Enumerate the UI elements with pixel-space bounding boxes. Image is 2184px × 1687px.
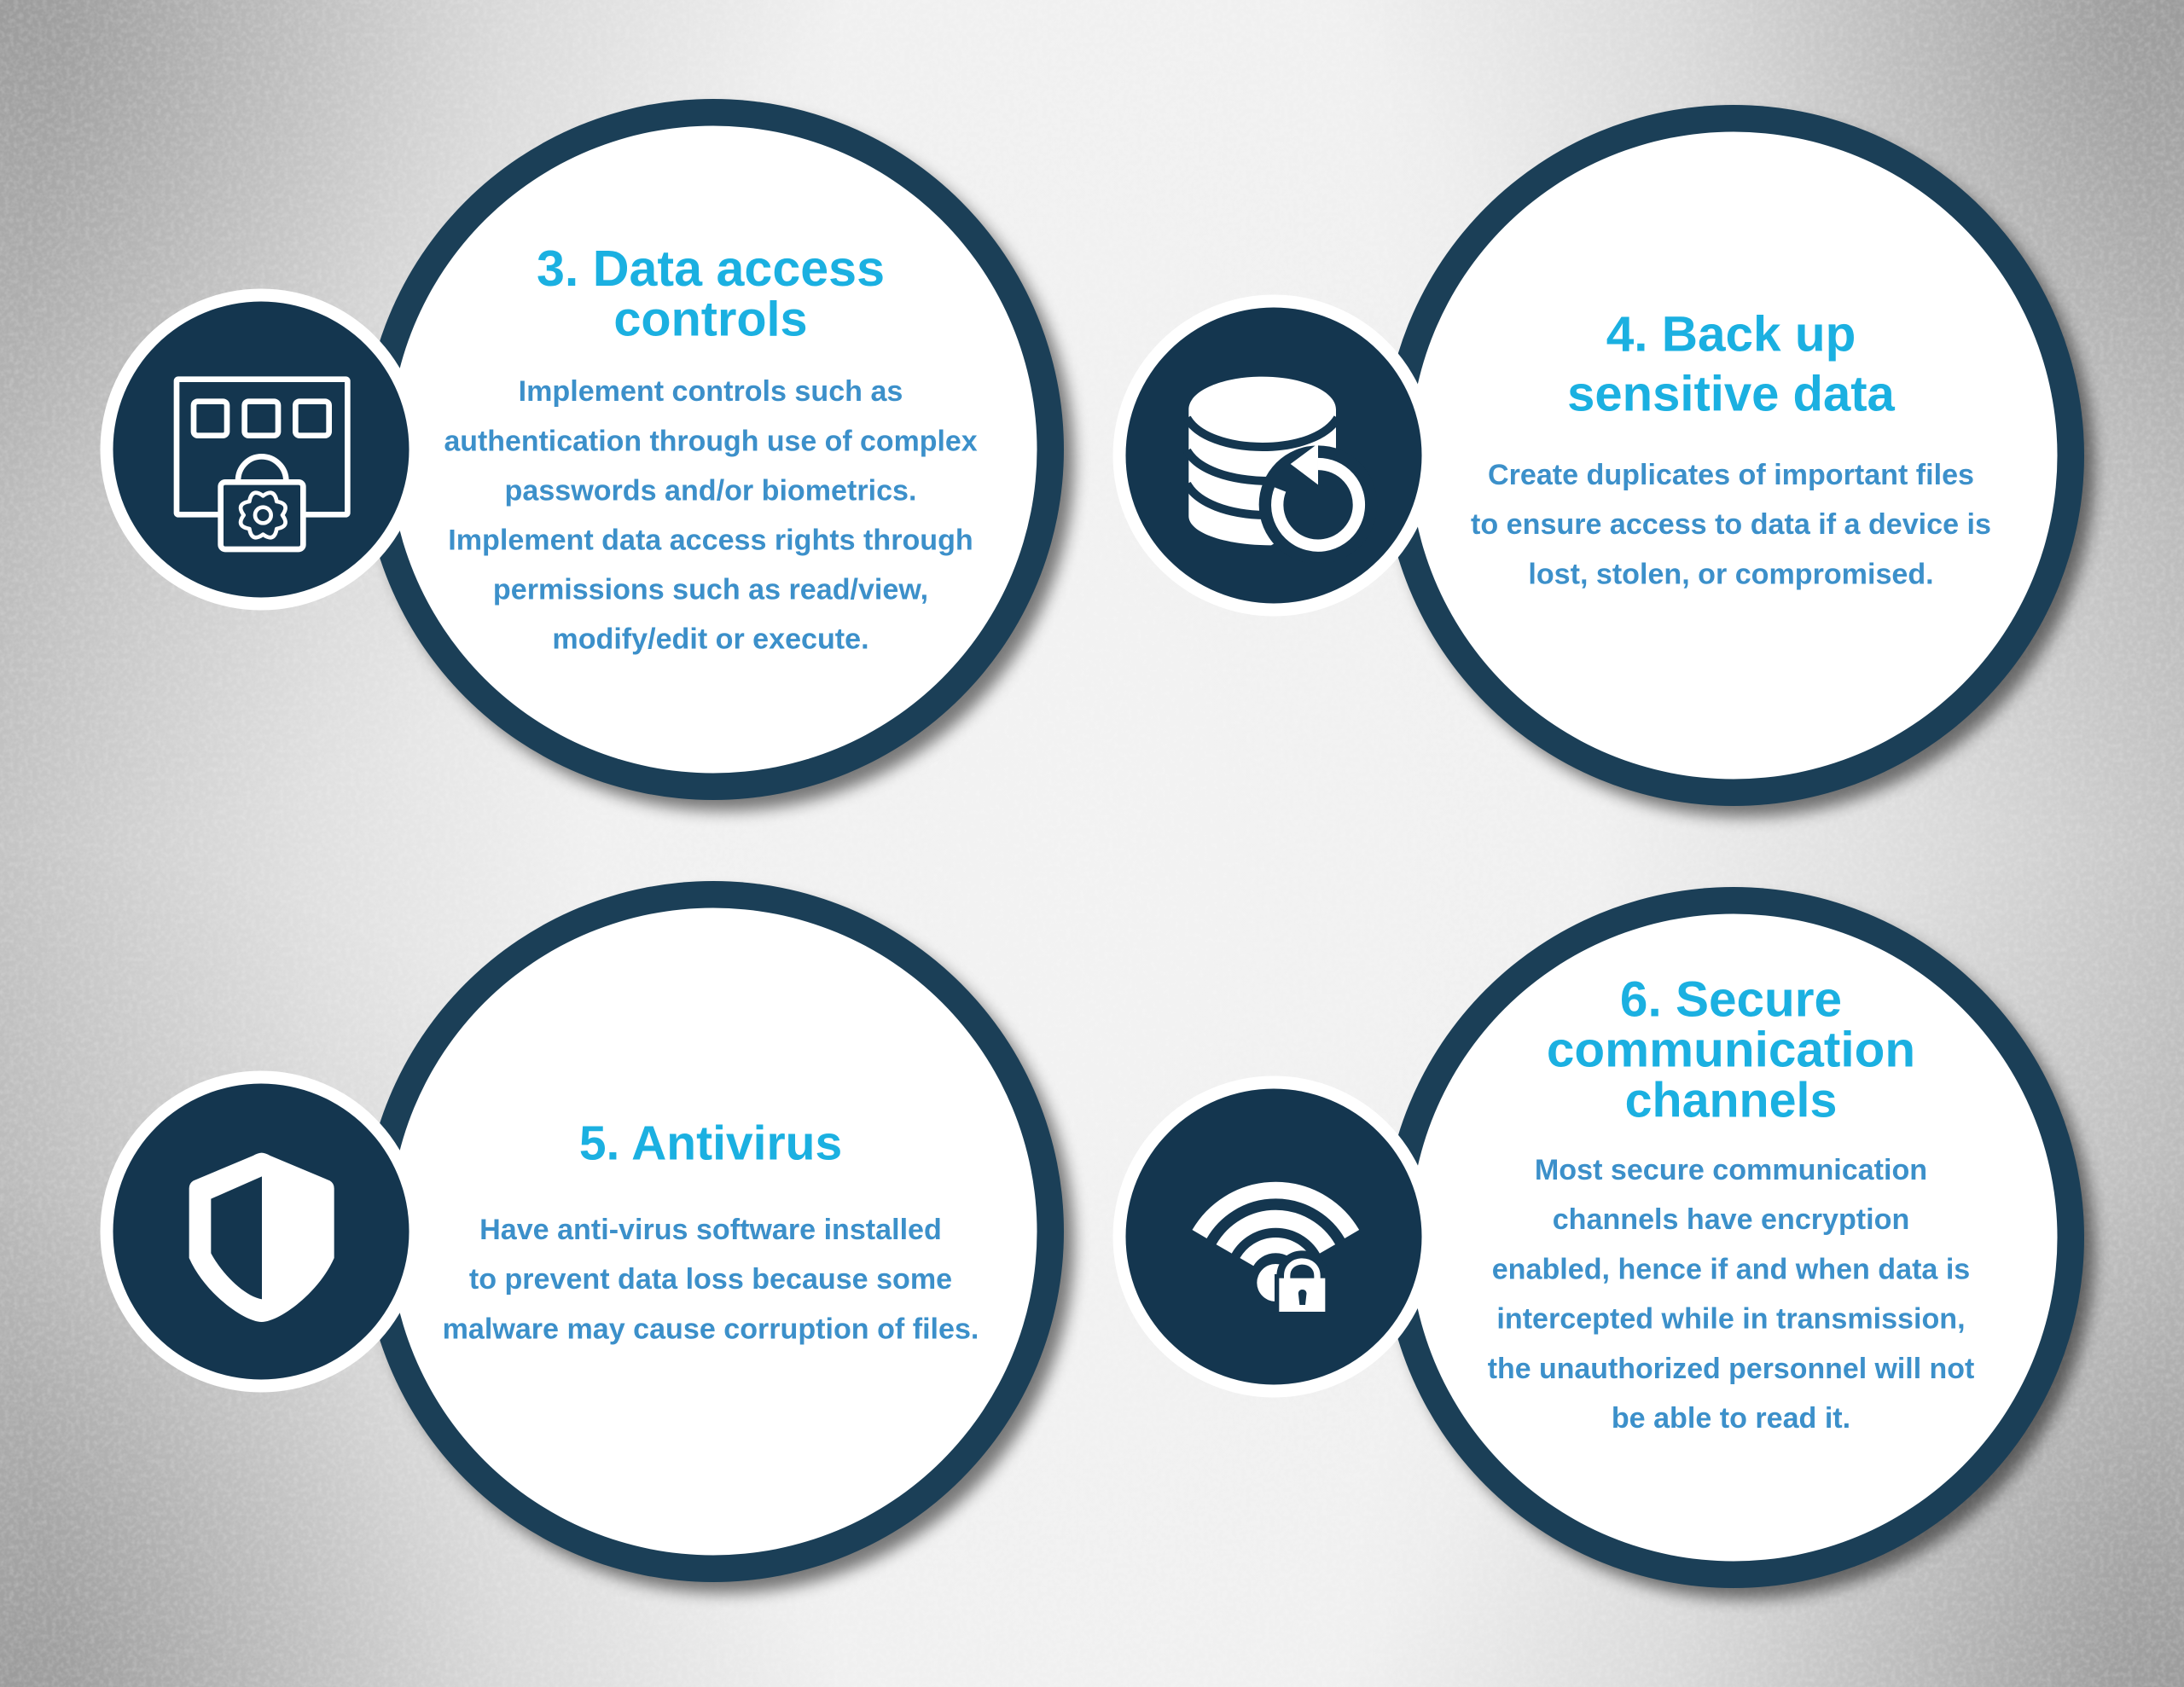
text block: secure channels description: the unauthorized personnel will not bbox=[1488, 1353, 1974, 1385]
text block: data access description: Implement data access rights through bbox=[448, 524, 973, 556]
text block: secure channels description: be able to read it. bbox=[1612, 1402, 1850, 1435]
icon: wifi with padlock bbox=[1112, 1076, 1435, 1397]
text block: backup description: lost, stolen, or compromised. bbox=[1528, 558, 1934, 590]
text block: data access description: modify/edit or execute. bbox=[552, 623, 869, 655]
text block: antivirus description: Have anti-virus software installed bbox=[479, 1214, 942, 1246]
icon: window with gear lock bbox=[101, 288, 421, 611]
heading: 6. Secure communication channels: channels bbox=[1625, 1073, 1837, 1128]
text block: data access description: permissions such as read/view, bbox=[493, 573, 928, 606]
text block: data access description bbox=[444, 375, 978, 655]
text block: backup description: to ensure access to data if a device is bbox=[1471, 508, 1991, 541]
text block: antivirus description: malware may cause corruption of files. bbox=[443, 1313, 979, 1346]
icon: database with restore arrow bbox=[1112, 295, 1435, 616]
text block: secure channels description: Most secure communication bbox=[1535, 1154, 1927, 1186]
text block: data access description: Implement controls such as bbox=[519, 375, 903, 408]
icon: shield bbox=[101, 1071, 421, 1392]
text block: backup description: Create duplicates of important files bbox=[1488, 459, 1974, 491]
text block: backup description bbox=[1471, 459, 1991, 590]
heading: 4. Back up sensitive data: sensitive data bbox=[1567, 367, 1896, 421]
text block: secure channels description: intercepted while in transmission, bbox=[1496, 1303, 1966, 1336]
text block: antivirus description: to prevent data loss because some bbox=[469, 1263, 952, 1296]
text block: antivirus description bbox=[443, 1214, 979, 1346]
text block: data access description: authentication through use of complex bbox=[444, 425, 978, 457]
panel: 5. Antivirus bbox=[101, 881, 1074, 1593]
heading: 6. Secure communication channels bbox=[1547, 972, 1915, 1128]
panel: 4. Back up sensitive data bbox=[1112, 105, 2094, 817]
text block: secure channels description: enabled, hence if and when data is bbox=[1492, 1254, 1970, 1286]
text block: secure channels description: channels have encryption bbox=[1553, 1203, 1909, 1236]
heading: 6. Secure communication channels: 6. Secure bbox=[1620, 972, 1842, 1027]
heading: 3. Data access controls bbox=[537, 240, 885, 346]
heading: 6. Secure communication channels: communication bbox=[1547, 1022, 1915, 1078]
heading: 4. Back up sensitive data: 4. Back up bbox=[1606, 307, 1856, 362]
heading: 4. Back up sensitive data bbox=[1567, 307, 1896, 421]
panel: 6. Secure communication channels bbox=[1112, 887, 2094, 1599]
text block: data access description: passwords and/or biometrics. bbox=[505, 474, 916, 507]
heading: 3. Data access controls: 3. Data access bbox=[537, 240, 885, 297]
text block: secure channels description bbox=[1488, 1154, 1974, 1435]
heading: 5. Antivirus: 5. Antivirus bbox=[579, 1116, 842, 1170]
heading: 3. Data access controls: controls bbox=[613, 292, 808, 346]
panel: 3. Data access controls bbox=[101, 99, 1074, 811]
